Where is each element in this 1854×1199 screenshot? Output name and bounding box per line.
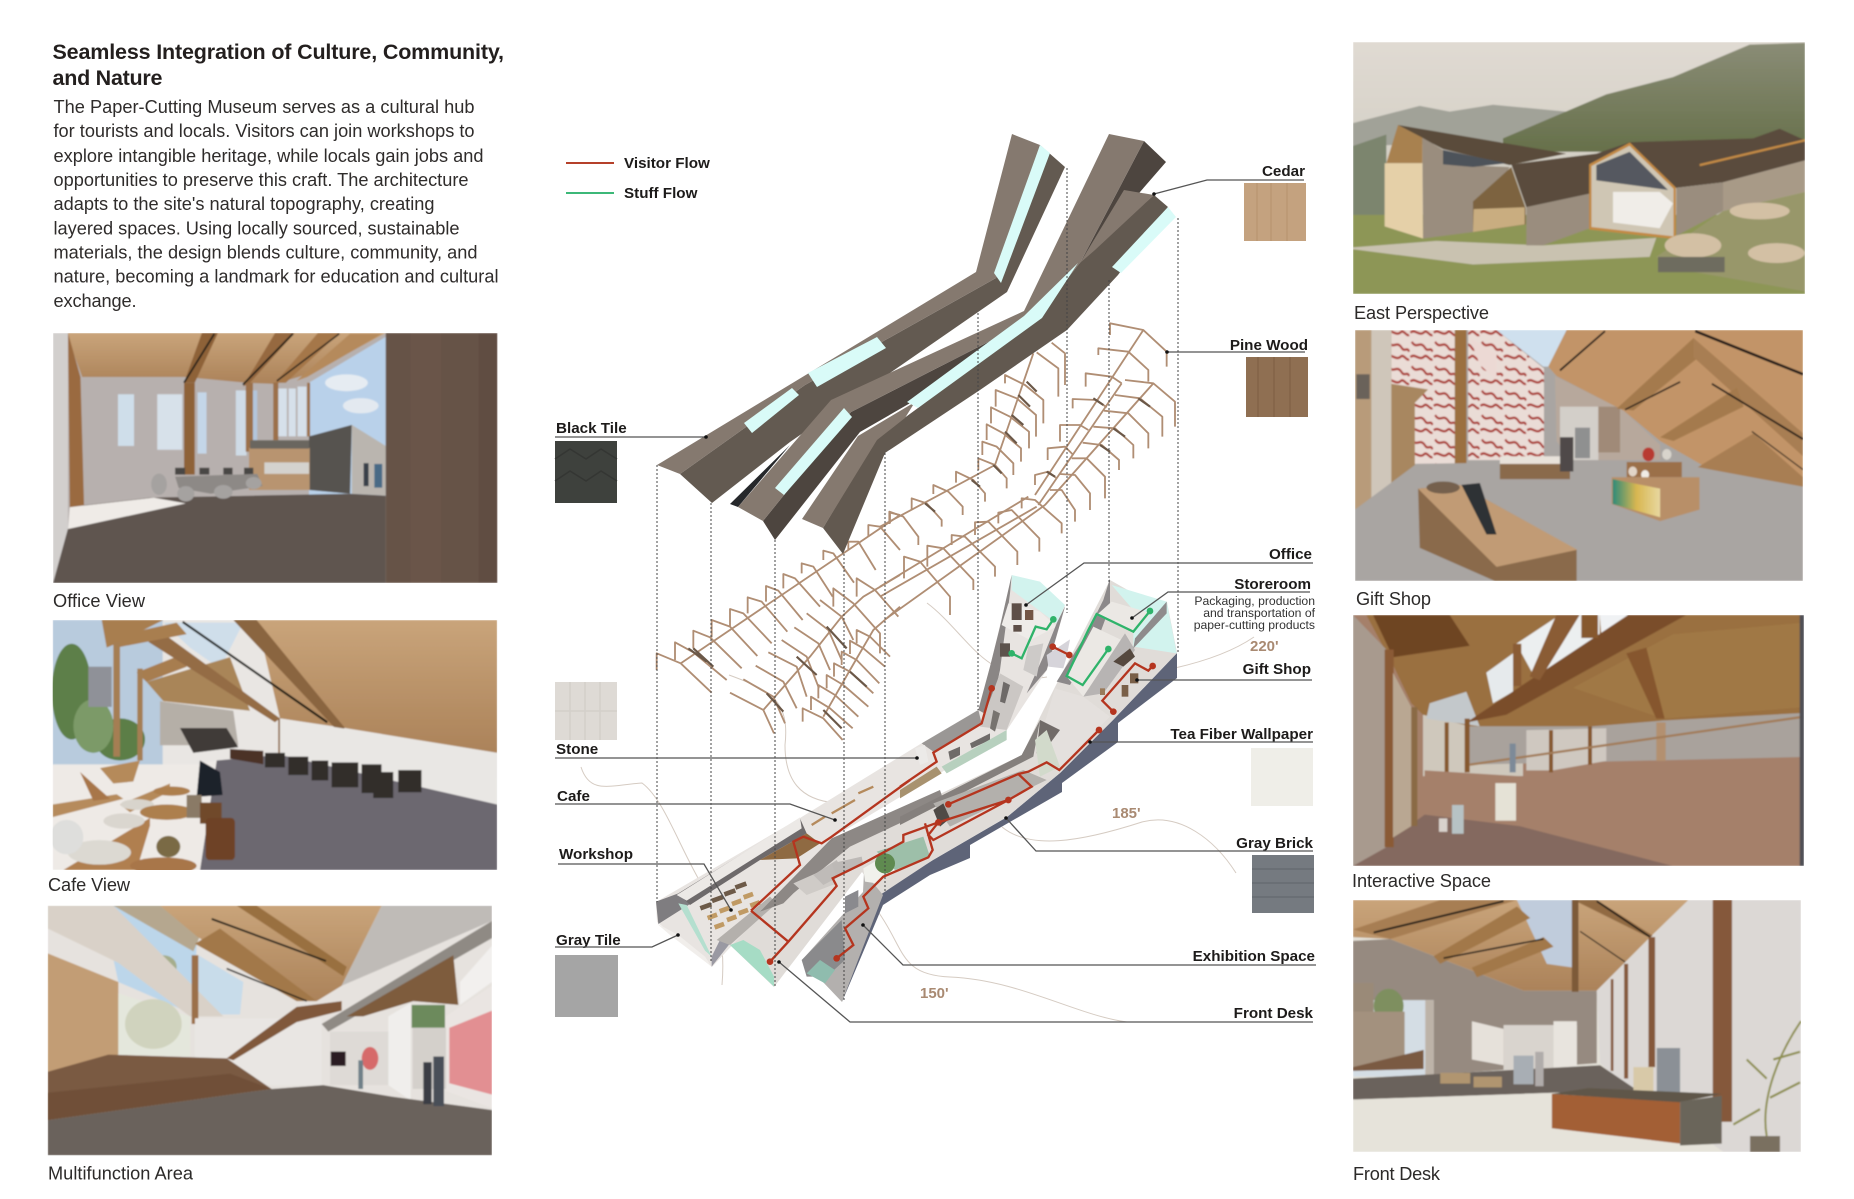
wing two surface — [730, 580, 1177, 987]
label: cafe: Cafe — [557, 788, 590, 805]
photo: cafe view — [52, 620, 498, 870]
label: tea fiber wallpaper with swatch — [1088, 726, 1313, 806]
intro text block: adapts to the site's natural topography, creating — [54, 194, 434, 214]
dashed projection lines — [657, 168, 1178, 1000]
label: gray tile with swatch: Gray Tile — [556, 932, 621, 949]
wing one surface — [656, 575, 1065, 967]
label: black tile with swatch — [555, 420, 708, 503]
dimension: 220: 220' — [1250, 638, 1279, 655]
photo: office view — [53, 333, 498, 583]
caption: gift shop: Gift Shop — [1356, 589, 1431, 609]
label: gray brick with swatch — [1004, 816, 1314, 913]
legend: Visitor Flow — [624, 155, 710, 172]
label: cedar with swatch — [1152, 163, 1306, 241]
intro text block: explore intangible heritage, while locals gain jobs and — [54, 146, 484, 166]
label: cafe — [555, 788, 837, 822]
label: front desk: Front Desk — [1234, 1005, 1314, 1022]
upper plan details — [900, 575, 1177, 840]
wing three surface — [802, 872, 883, 1002]
label: pine wood with swatch: Pine Wood — [1230, 337, 1308, 354]
label: workshop: Workshop — [559, 846, 633, 863]
dimension: 150: 150' — [920, 985, 949, 1002]
caption: front desk: Front Desk — [1353, 1164, 1441, 1184]
intro text block — [54, 97, 498, 311]
label: front desk — [777, 960, 1314, 1022]
intro text block: opportunities to preserve this craft. The architecture — [54, 170, 468, 190]
photo: east perspective — [1353, 42, 1805, 294]
contour lines — [581, 603, 1254, 1022]
intro text block: The Paper-Cutting Museum serves as a cultural hub — [54, 97, 474, 117]
roof wing two — [730, 134, 1166, 540]
title — [52, 40, 504, 90]
red and green routes upper — [1012, 611, 1150, 685]
label: workshop — [558, 846, 733, 912]
caption: interactive space: Interactive Space — [1352, 871, 1491, 891]
caption: east perspective: East Perspective — [1354, 303, 1489, 323]
photo: front desk — [1353, 900, 1801, 1152]
truss layer upper right — [880, 323, 1175, 618]
photo: interactive space — [1353, 615, 1804, 866]
label: pine wood with swatch — [1165, 337, 1308, 417]
intro text block: for tourists and locals. Visitors can join workshops to — [54, 121, 474, 141]
roof wing one — [657, 134, 1065, 503]
label: office: Office — [1269, 546, 1312, 563]
label: storeroom with note: paper-cutting products — [1194, 618, 1315, 632]
label: gray tile with swatch — [555, 932, 680, 1017]
label: gray brick with swatch: Gray Brick — [1236, 835, 1314, 852]
roof layer: black tile roofs — [657, 134, 1176, 554]
label: office — [1024, 546, 1313, 607]
label: storeroom with note: Storeroom — [1234, 576, 1311, 593]
title: and Nature — [52, 66, 163, 90]
label: gift shop — [1135, 661, 1312, 682]
label: gift shop: Gift Shop — [1243, 661, 1311, 678]
title: Seamless Integration of Culture, Community, — [52, 40, 504, 64]
navy base strip — [842, 653, 1177, 1002]
label: storeroom with note — [1130, 576, 1316, 632]
caption: office view: Office View — [53, 591, 146, 611]
label: storeroom with note: Packaging, production — [1194, 594, 1315, 608]
label: stone with swatch — [555, 682, 919, 760]
intro text block: exchange. — [54, 291, 136, 311]
label: storeroom with note: and transportation of — [1203, 606, 1316, 620]
legend: Stuff Flow — [624, 185, 698, 202]
intro text block: nature, becoming a landmark for education and cultural — [54, 267, 498, 287]
caption: cafe view: Cafe View — [48, 875, 131, 895]
red visitor route lower — [751, 780, 938, 962]
legend — [566, 155, 710, 202]
label: cedar with swatch: Cedar — [1262, 163, 1305, 180]
lower plan details — [656, 780, 943, 987]
intro text block: materials, the design blends culture, community, and — [54, 243, 478, 263]
photo: gift shop — [1355, 330, 1803, 581]
caption: multifunction area: Multifunction Area — [48, 1164, 194, 1184]
photo: multifunction area — [48, 906, 492, 1156]
label: exhibition space: Exhibition Space — [1193, 948, 1315, 965]
label: exhibition space — [861, 923, 1316, 965]
truss layer lower left — [657, 513, 900, 740]
dimension: 185: 185' — [1112, 805, 1141, 822]
intro text block: layered spaces. Using locally sourced, sustainable — [54, 218, 460, 238]
label: stone with swatch: Stone — [556, 741, 598, 758]
label: black tile with swatch: Black Tile — [556, 420, 627, 437]
roof wing three — [802, 190, 1176, 554]
floor plan layer — [656, 575, 1177, 1002]
label: tea fiber wallpaper with swatch: Tea Fiber Wallpaper — [1170, 726, 1313, 743]
